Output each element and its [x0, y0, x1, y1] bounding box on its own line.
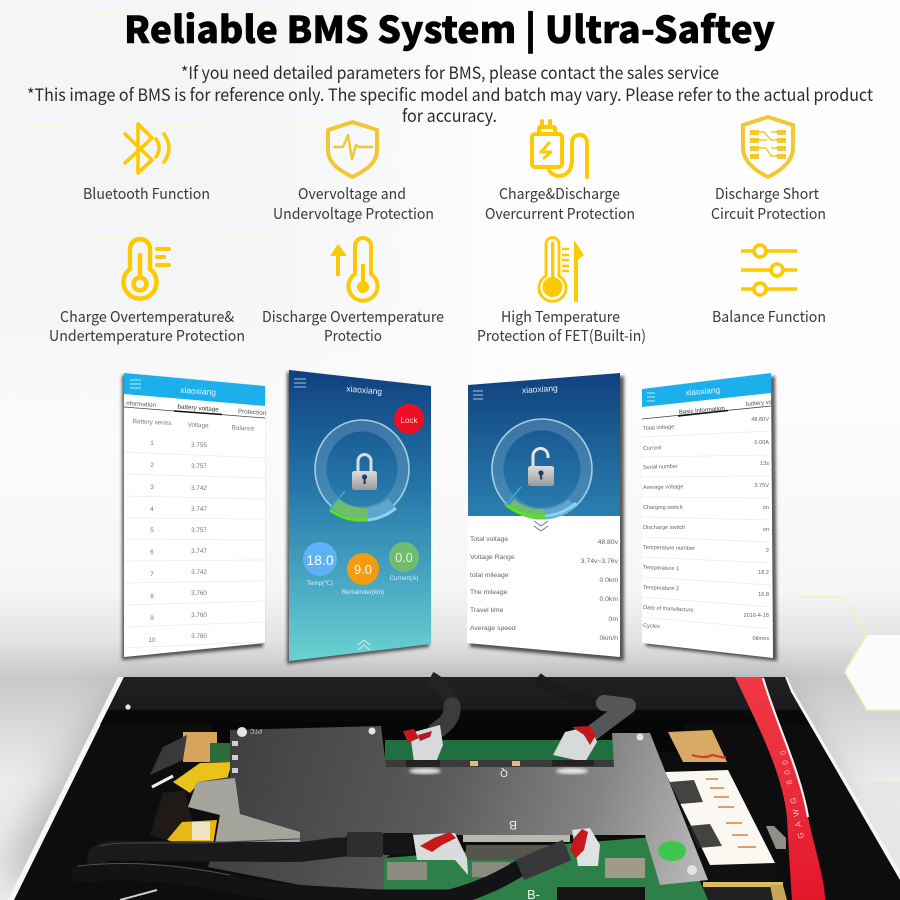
terminals [403, 725, 600, 875]
green sticker [658, 841, 686, 861]
phone screen: unlocked gauge: 0.0km [599, 596, 618, 603]
phone screen: battery voltage list: 2 [150, 462, 154, 469]
notice text [27, 59, 874, 127]
notice text: *If you need detailed parameters for BMS, please contact the sales service [181, 59, 719, 84]
phone screen: basic information: Serial number [643, 464, 678, 471]
phone screen: battery voltage list: 3.760 [191, 633, 207, 640]
bottom-right hexagon decoration [802, 597, 900, 880]
phone screen: basic information: 0times [753, 636, 769, 642]
phone screen: basic information: 48.80V [751, 417, 769, 423]
metal heat plate: PTC [249, 727, 262, 733]
icon: sliders [741, 245, 797, 295]
top cables [430, 678, 628, 733]
icon: thermometer with ticks and arrow [539, 238, 584, 302]
phone screen: basic information: Temperature 2 [643, 585, 679, 592]
label [49, 306, 245, 346]
top green pcb [385, 740, 617, 768]
phone screen: basic information: Current [643, 445, 662, 452]
gauge dial [492, 419, 592, 519]
metal heat plate: Q [500, 767, 508, 778]
bolt [766, 826, 786, 849]
phone screen: basic information: on [763, 527, 769, 533]
phone screen: battery voltage list: 8 [150, 593, 154, 600]
heat-shrink sleeve [347, 832, 413, 857]
label: Bluetooth Function [83, 183, 210, 204]
stat bubbles: Remainder(km) [342, 589, 384, 596]
phone screen: unlocked gauge: Travel time [470, 607, 504, 614]
phone screen: basic information: Basic information [679, 406, 725, 416]
phone screen: basic information: 13s [760, 461, 769, 467]
phone screen: basic information: Date of manufacture [643, 605, 694, 614]
label [711, 183, 826, 224]
phone screen: unlocked gauge: Voltage Range [470, 554, 515, 561]
phone screen: battery voltage list: 9 [150, 615, 154, 622]
phone screen: basic information [642, 373, 777, 661]
phone screen: battery voltage list: Battery series [133, 418, 171, 427]
phone screen: unlocked gauge: 48.80v [598, 539, 619, 546]
phone screen: basic information: Discharge switch [643, 525, 685, 531]
wood spacers [183, 730, 727, 762]
phone screen: battery voltage list: battery voltage [177, 404, 219, 413]
phone screen: basic information: 3.75V [754, 483, 769, 489]
label: Discharge Short [715, 183, 819, 204]
icon: thermometer with up arrow [330, 238, 378, 301]
phone screen: unlocked gauge: The mileage [470, 589, 508, 596]
icon: charger [532, 121, 587, 177]
icon: circuit shield [743, 117, 793, 177]
phone screen: battery voltage list: 3.742 [191, 485, 207, 492]
phone screen: basic information: Temperature 1 [643, 565, 679, 572]
phone screen: battery voltage list: 7 [150, 571, 154, 578]
phone screen: locked gauge: xiaoxiang [346, 383, 383, 397]
phone screen: battery voltage list: 3.755 [191, 442, 207, 449]
phone screen: battery voltage list: Balance [232, 424, 255, 433]
feature: Bluetooth function [83, 124, 210, 204]
inner top wall [100, 677, 810, 725]
phone screen: basic information: xiaoxiang [685, 385, 721, 397]
feature: high temperature protection of FET [477, 238, 646, 346]
label: Charge&Discharge [499, 183, 620, 204]
phone screen: basic information: battery vo [746, 400, 773, 408]
feature: charge over and under temperature protection [49, 239, 245, 346]
phone screen: basic information: Total voltage [643, 424, 674, 432]
box interior [14, 677, 900, 900]
feature: balance function [712, 245, 826, 327]
phone screen: battery voltage list: 4 [150, 506, 154, 513]
phone screen: battery voltage list: 1 [150, 440, 154, 447]
phone screen: unlocked gauge: Average speed [470, 625, 516, 632]
metal heat plate [188, 726, 708, 890]
phone screen: battery voltage list: xiaoxiang [180, 385, 217, 397]
bottom green pcb [384, 835, 708, 900]
phone screen: battery voltage list: 3.747 [191, 506, 207, 513]
dark under-board [213, 722, 683, 752]
icon: bluetooth [125, 124, 169, 173]
stat bubbles: Temp(℃) [307, 580, 333, 587]
label: Undertemperature Protection [49, 325, 245, 346]
notice text: for accuracy. [402, 102, 497, 127]
phone screen: unlocked gauge: total mileage [470, 572, 509, 579]
phone screen: battery voltage list [122, 373, 267, 660]
lower cables [78, 837, 567, 898]
phone screen: basic information: 0.00A [754, 440, 769, 446]
label: Discharge Overtemperature [262, 306, 444, 327]
red cable: GAWG 8000 [778, 749, 806, 839]
phone screen: battery voltage list: Voltage [187, 421, 209, 430]
phone screen: basic information: Average voltage [643, 484, 683, 491]
phone screen: battery voltage list: 3.747 [191, 548, 207, 555]
phone screen: battery voltage list: 3 [150, 484, 154, 491]
phone screen: basic information: 2 [766, 548, 769, 554]
phone screen: locked gauge: Lock [401, 416, 418, 425]
metal heat plate: B [509, 818, 517, 832]
icon: thermometer with bars [124, 239, 169, 299]
box outer rim [8, 677, 900, 900]
red cable [735, 677, 825, 900]
feature: discharge short circuit protection [711, 117, 826, 224]
label: Balance Function [712, 306, 826, 327]
feature: discharge overtemperature protection [262, 238, 444, 346]
phone screen: battery voltage list: 3.760 [191, 612, 207, 619]
product photo: BMS board in battery box [8, 677, 900, 900]
notice text: *This image of BMS is for reference only. The specific model and batch may vary. Please refer to the actual product [27, 81, 874, 106]
phone screen: basic information: 2016-4-18 [743, 613, 769, 619]
lower wood strip [703, 865, 787, 900]
phone screen: battery voltage list: 6 [150, 549, 154, 556]
label: Charge Overtemperature& [60, 306, 234, 327]
phone screen: battery voltage list: nformation [126, 400, 157, 409]
phone screen: unlocked gauge: 0m [609, 616, 618, 623]
label: High Temperature [501, 306, 620, 327]
stat bubbles: 9.0 [354, 562, 372, 577]
phone screen: basic information: Charging switch [643, 505, 683, 511]
phone screen: basic information: 16.8 [758, 592, 769, 598]
phone screen: unlocked gauge: xiaoxiang [522, 383, 558, 395]
phone screen: locked gauge [287, 370, 431, 664]
phone screen: battery voltage list: Protection [238, 408, 267, 417]
label: Protectio [324, 325, 382, 346]
phone screen: basic information: Temperature number [643, 545, 695, 552]
feature: charge and discharge overcurrent protection [485, 121, 635, 224]
stat bubbles: 18.0 [306, 552, 334, 568]
gauge dial [315, 420, 409, 520]
stat bubbles: 0.0 [395, 551, 413, 565]
phone screen: unlocked gauge [467, 373, 624, 661]
phone screen: basic information: Cycles [643, 623, 660, 630]
feature: overvoltage and undervoltage protection [273, 122, 434, 224]
label: Circuit Protection [711, 203, 826, 224]
phone screen: battery voltage list: 5 [150, 527, 154, 534]
phone screen: battery voltage list: 3.757 [191, 463, 207, 470]
phone screen: battery voltage list: 3.760 [191, 590, 207, 597]
title: Reliable BMS System | Ultra-Saftey [124, 0, 775, 54]
label sticker [665, 770, 775, 865]
phone screen: unlocked gauge: 0km/h [599, 635, 618, 642]
phone screen: battery voltage list: 3.757 [191, 527, 207, 534]
icon: shield with pulse [328, 122, 377, 177]
phone screen: basic information: 18.2 [758, 570, 769, 576]
label: Undervoltage Protection [273, 203, 434, 224]
label [273, 183, 434, 224]
label: Overcurrent Protection [485, 203, 635, 224]
phone screen: basic information: on [763, 505, 769, 511]
label: Overvoltage and [298, 183, 406, 204]
phone screen: battery voltage list: 3.742 [191, 569, 207, 576]
stat bubbles: Current(A) [390, 575, 418, 582]
wiring left [120, 735, 237, 900]
label [485, 183, 635, 224]
label: Protection of FET(Built-in) [477, 325, 646, 346]
phone screen: unlocked gauge: Total voltage [470, 536, 508, 543]
stat bubbles [303, 542, 419, 596]
phone screen: battery voltage list: 10 [148, 637, 156, 644]
phone screen: unlocked gauge: 3.74v~3.76v [581, 558, 619, 565]
label [477, 306, 646, 346]
label [262, 306, 444, 346]
phone screen: unlocked gauge: 0.0km [599, 577, 618, 584]
